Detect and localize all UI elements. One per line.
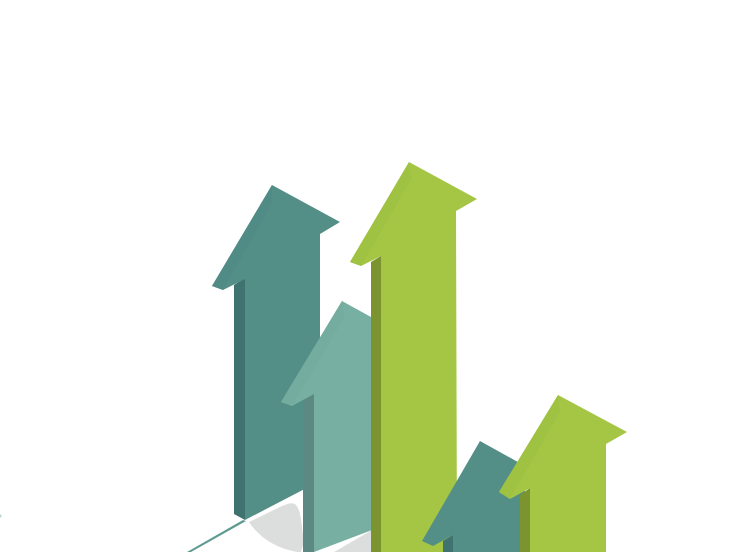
ground shadow: behind light teal arrow bbox=[334, 530, 372, 552]
arrow: tall dark teal bbox=[212, 185, 340, 520]
ground line bbox=[187, 520, 246, 552]
edge speck bbox=[0, 514, 2, 518]
ground shadow: behind tall teal arrow bbox=[249, 503, 304, 552]
arrow: small green bbox=[499, 395, 627, 552]
arrow: small dark teal bbox=[422, 441, 525, 552]
arrow: light teal bbox=[281, 301, 380, 552]
arrow: tall green bbox=[350, 162, 477, 552]
